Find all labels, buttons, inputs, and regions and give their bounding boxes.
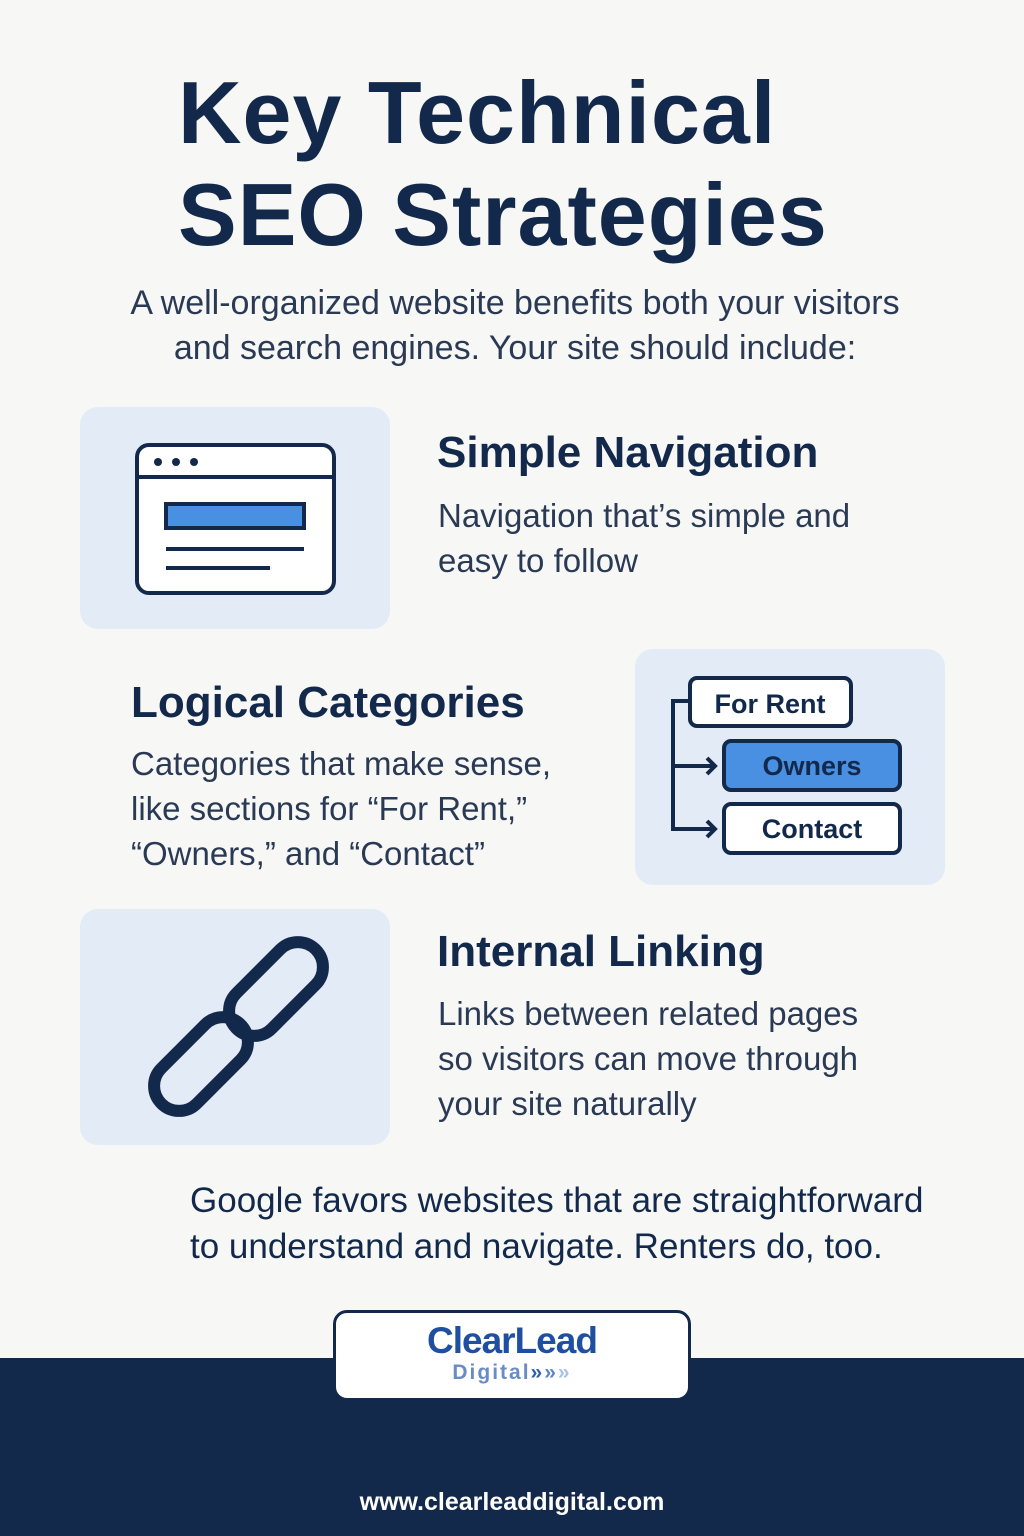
footer band xyxy=(0,1358,1024,1536)
text: internal linking: your site naturally xyxy=(438,1085,697,1122)
closing statement xyxy=(190,1181,923,1266)
panel: categories diagram: Contact xyxy=(762,814,862,844)
subtitle: and search engines. Your site should include: xyxy=(174,329,856,367)
logo xyxy=(333,1310,691,1401)
logo: Digital»»» xyxy=(452,1361,572,1384)
text: navigation: easy to follow xyxy=(438,542,638,579)
logo: ClearLead xyxy=(427,1320,597,1361)
text: categories xyxy=(131,745,551,872)
text: internal linking: Links between related pages xyxy=(438,995,858,1032)
panel: categories diagram: For Rent xyxy=(714,689,826,719)
subtitle: A well-organized website benefits both your visitors xyxy=(130,284,900,322)
panel: navigation icon xyxy=(80,407,390,629)
text: navigation: Navigation that’s simple and xyxy=(438,497,850,534)
title xyxy=(178,63,828,264)
closing statement: Google favors websites that are straightforward xyxy=(190,1181,923,1220)
text: categories: Categories that make sense, xyxy=(131,745,551,782)
text: categories: “Owners,” and “Contact” xyxy=(131,835,485,872)
heading: logical categories: Logical Categories xyxy=(131,678,525,727)
text: categories: like sections for “For Rent,” xyxy=(131,790,527,827)
panel: link icon xyxy=(80,909,390,1145)
title: SEO Strategies xyxy=(178,165,828,264)
subtitle xyxy=(130,284,900,367)
heading: internal linking: Internal Linking xyxy=(437,927,765,976)
title: Key Technical xyxy=(178,63,776,162)
closing statement: to understand and navigate. Renters do, too. xyxy=(190,1227,883,1266)
panel: categories diagram: Owners xyxy=(762,751,862,781)
text: internal linking: so visitors can move through xyxy=(438,1040,858,1077)
panel: categories diagram xyxy=(635,649,945,885)
text: navigation xyxy=(438,497,850,579)
text: internal linking xyxy=(438,995,858,1122)
heading: simple navigation: Simple Navigation xyxy=(437,428,818,477)
footer url: www.clearleaddigital.com xyxy=(360,1488,664,1516)
